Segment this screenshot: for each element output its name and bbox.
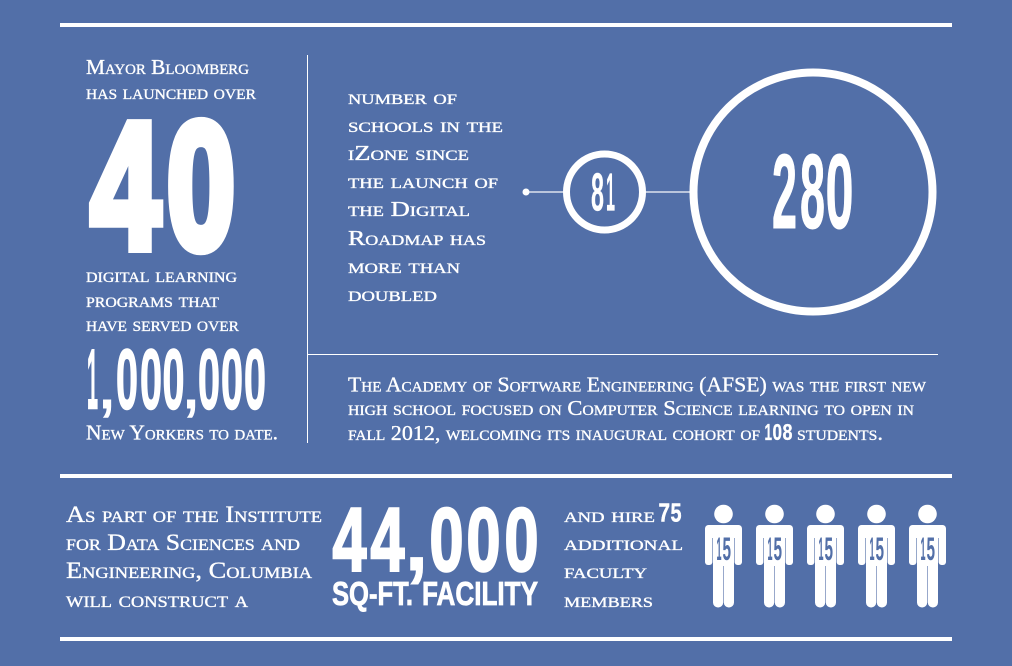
text: and hire 75 additional faculty members — [564, 498, 683, 612]
text: Mayor Bloomberg intro: Mayor Bloomberg — [86, 55, 249, 79]
panel: digital learning programs: 0 — [244, 332, 266, 428]
big number 1,000,000: 0 — [140, 332, 162, 428]
text: digital learning programs: digital learning — [86, 263, 237, 287]
icon: person 3 — [807, 505, 844, 608]
connector line with dot — [522, 188, 696, 196]
text: number of schools description: iZone since — [348, 141, 469, 165]
big number 44,000 — [332, 490, 538, 590]
circle: 81 schools: 8 — [591, 162, 604, 222]
panel: digital learning programs — [86, 55, 278, 444]
text: number of schools description: doubled — [348, 282, 437, 306]
icons: five faculty figures — [705, 505, 946, 608]
text: Institute description: Engineering, Columbia — [66, 558, 313, 583]
icon: person 5: 1 — [920, 531, 926, 567]
big number 44,000: 0 — [430, 490, 464, 590]
circle: 280 schools: 8 — [800, 133, 825, 251]
text: Institute description: As part of the Institute — [66, 502, 322, 527]
text: Institute description: will construct a — [66, 587, 249, 612]
big number 1,000,000: , — [183, 354, 199, 422]
big number 44,000: 0 — [466, 490, 500, 590]
big number 44,000: 4 — [370, 490, 404, 590]
text: number of schools description — [348, 85, 503, 306]
text: digital learning programs — [86, 263, 239, 336]
big number 1,000,000: 0 — [116, 332, 138, 428]
icon: person 1: 5 — [722, 531, 731, 567]
big number 1,000,000: , — [99, 354, 115, 422]
text: number of schools description: number of — [348, 85, 457, 109]
text: Mayor Bloomberg intro: has launched over — [86, 80, 256, 104]
text: number of schools description: the Digital — [348, 197, 470, 221]
text: digital learning programs: have served over — [86, 312, 239, 336]
panel: Academy of Software Engineering text: The Academy of Software Engineering (AFSE) was the first new — [348, 372, 927, 396]
label: sq-ft. facility: FACILITY — [422, 575, 538, 612]
icon: person 1: 1 — [716, 531, 722, 567]
big number 40: 4 — [90, 86, 160, 287]
icon: person 2: 1 — [768, 531, 772, 567]
text: Institute description — [66, 502, 322, 612]
icon: person 2 — [756, 505, 793, 608]
panel: Columbia Institute for Data Sciences — [66, 490, 946, 612]
icon: person 4: 1 — [870, 531, 874, 567]
big number 1,000,000: 1 — [87, 332, 98, 428]
text: number of schools description: the launch of — [348, 169, 498, 193]
panel: Academy of Software Engineering text — [348, 372, 927, 445]
circle: 280 schools: 2 — [772, 133, 797, 251]
text: and hire 75 additional faculty members: additional — [564, 531, 683, 555]
icon: person 4 — [858, 505, 895, 608]
icon: person 5 — [909, 505, 946, 608]
panel: Academy of Software Engineering text: high school focused on Computer Science learning to open in — [348, 396, 914, 420]
big number 44,000: , — [404, 490, 429, 590]
label: sq-ft. facility — [332, 575, 538, 612]
text: and hire 75 additional faculty members: faculty — [564, 559, 647, 583]
text: Mayor Bloomberg intro — [86, 55, 256, 104]
text: New Yorkers to date: New Yorkers to date. — [86, 420, 278, 444]
big number 44,000: 4 — [332, 490, 366, 590]
icon: person 5: 5 — [926, 531, 935, 567]
text: number of schools description: Roadmap has — [348, 226, 486, 250]
icon: person 3: 1 — [818, 531, 824, 567]
text: and hire 75 additional faculty members: members — [564, 588, 653, 612]
icon: person 3: 5 — [824, 531, 833, 567]
circle: 81 schools — [566, 154, 642, 230]
big number 44,000: 0 — [504, 490, 538, 590]
text: Institute description: for Data Sciences and — [66, 530, 300, 555]
text: and hire 75 additional faculty members: 5 — [670, 498, 682, 528]
text: number of schools description: schools in the — [348, 113, 503, 137]
icon: person 2: 5 — [774, 531, 782, 567]
big number 40 — [90, 86, 235, 287]
panel: Academy of Software Engineering text: 8 — [782, 419, 793, 445]
text: and hire 75 additional faculty members: 7 — [658, 498, 670, 528]
big number 1,000,000: 0 — [221, 332, 243, 428]
circle: 280 schools — [694, 72, 932, 312]
panel: iZone schools — [348, 72, 932, 312]
icon: person 4: 5 — [876, 531, 884, 567]
panel: Academy of Software Engineering text: 1 — [764, 419, 772, 445]
icon: person 1 — [705, 505, 742, 608]
big number 40: 0 — [167, 86, 235, 287]
big number 1,000,000: 0 — [198, 332, 220, 428]
panel: Academy of Software Engineering text: fall 2012, welcoming its inaugural cohort of — [348, 421, 760, 445]
circle: 81 schools: 1 — [606, 162, 615, 222]
big number 1,000,000 — [87, 332, 266, 428]
circle: 280 schools: 0 — [826, 133, 854, 251]
text: number of schools description: more than — [348, 254, 460, 278]
panel: Academy of Software Engineering text: 0 — [772, 419, 782, 445]
panel: Academy of Software Engineering text: students. — [797, 421, 883, 445]
big number 1,000,000: 0 — [162, 332, 184, 428]
text: and hire 75 additional faculty members: and hire — [564, 503, 655, 527]
text: digital learning programs: programs that — [86, 288, 219, 312]
label: sq-ft. facility: SQ-FT. — [332, 575, 413, 612]
